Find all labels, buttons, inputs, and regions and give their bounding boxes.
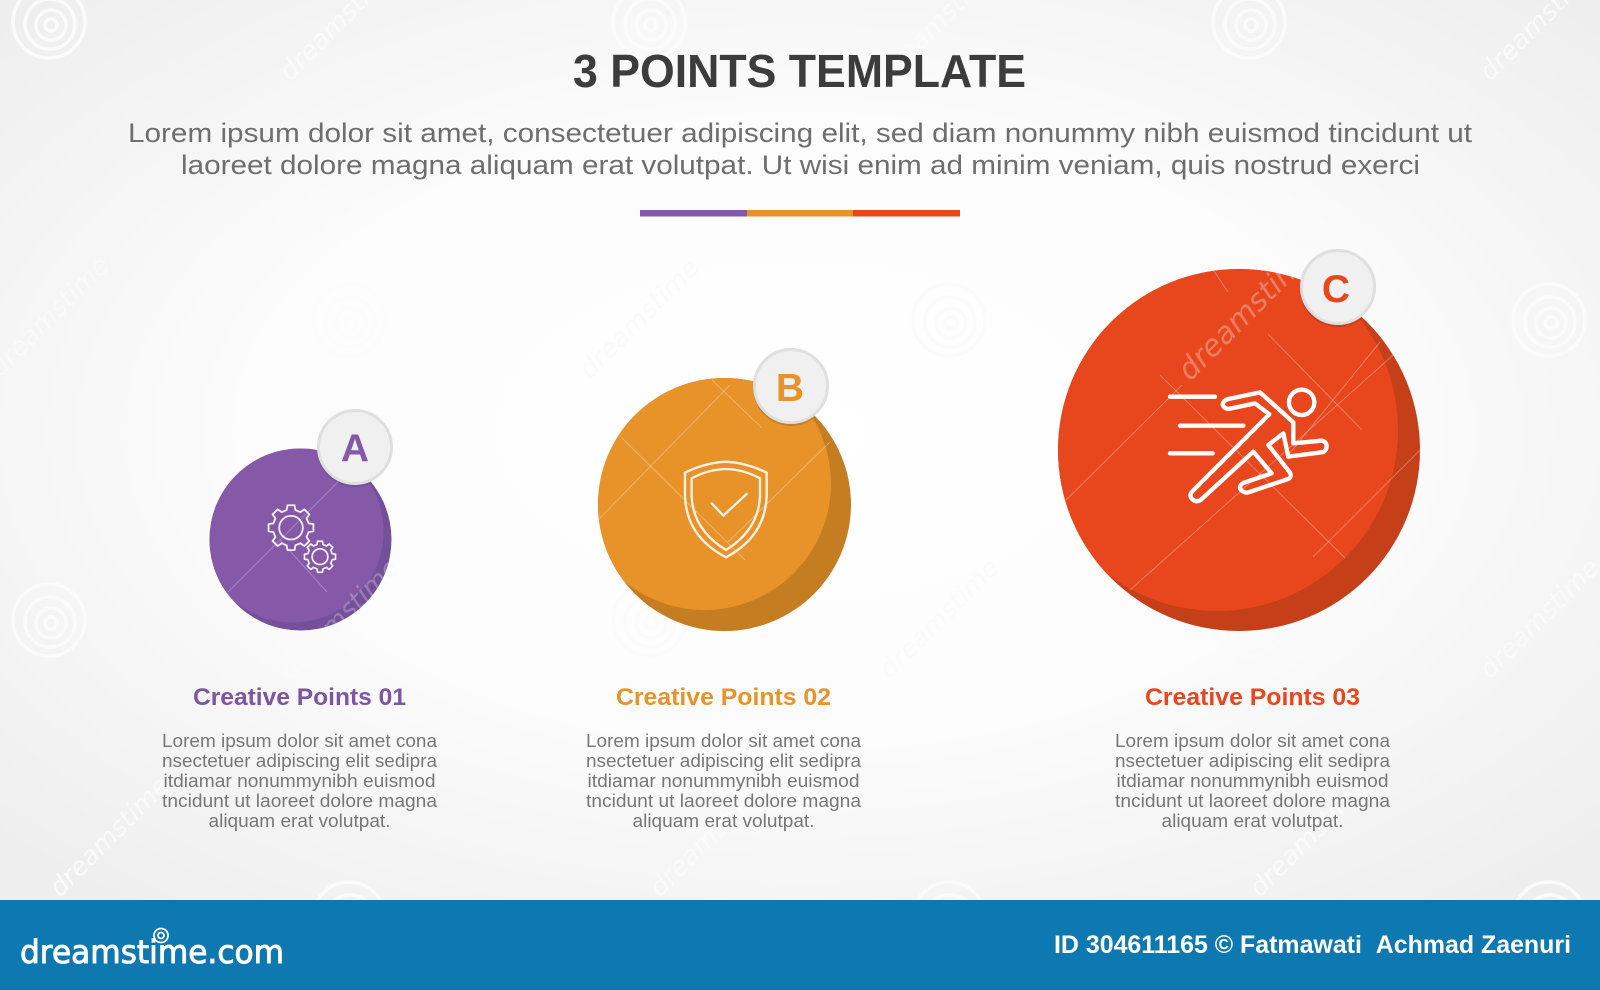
watermark pattern: dreamstime <box>1244 771 1376 903</box>
watermark pattern: dreamstime <box>574 253 706 385</box>
point 01 label: Creative Points 01 <box>193 684 406 711</box>
title: 3 POINTS TEMPLATE <box>573 45 1026 97</box>
footer credit: ID 304611165 © Fatmawati Achmad Zaenuri <box>1054 931 1571 959</box>
point 02 text block: Lorem ipsum dolor sit amet cona <box>586 731 862 751</box>
point 01 text block <box>162 731 438 831</box>
point 01 text block: nsectetuer adipiscing elit sedipra <box>162 751 438 771</box>
point C circle <box>1058 269 1420 631</box>
icon: running man <box>1170 390 1327 501</box>
icon: gears <box>269 505 336 572</box>
badge A <box>318 410 392 484</box>
badge B: B <box>776 367 804 410</box>
point A circle: dreamstime <box>274 553 406 685</box>
footer bar <box>0 900 1600 990</box>
point 03 label: Creative Points 03 <box>1145 684 1360 711</box>
point 03 text block: aliquam erat volutpat. <box>1162 811 1344 831</box>
tricolor divider <box>640 210 960 216</box>
badge B <box>754 350 828 422</box>
point 03 text block: nsectetuer adipiscing elit sedipra <box>1115 751 1391 771</box>
point 03 text block: Lorem ipsum dolor sit amet cona <box>1115 731 1391 751</box>
watermark pattern: dreamstime <box>44 771 176 903</box>
watermark pattern: dreamstime <box>274 553 406 685</box>
footer logo: dreamstime.com <box>20 933 284 971</box>
point 03 text block <box>1115 731 1391 831</box>
subtitle text block: laoreet dolore magna aliquam erat volutpat. Ut wisi enim ad minim veniam, quis nostrud exerci <box>181 150 1420 180</box>
point 02 text block <box>586 731 862 831</box>
badge C <box>1302 250 1374 324</box>
subtitle text block <box>128 118 1473 180</box>
point 01 text block: aliquam erat volutpat. <box>208 811 390 831</box>
point C circle: dreamstime <box>1171 235 1324 388</box>
point 01 text block: tncidunt ut laoreet dolore magna <box>162 791 438 811</box>
point 03 text block: itdiamar nonummynibh euismod <box>1116 771 1388 791</box>
point 02 text block: itdiamar nonummynibh euismod <box>588 771 860 791</box>
point B circle <box>598 378 851 631</box>
point 01 text block: Lorem ipsum dolor sit amet cona <box>162 731 438 751</box>
badge C: C <box>1322 268 1350 311</box>
point 03 text block: tncidunt ut laoreet dolore magna <box>1115 791 1391 811</box>
point 02 text block: aliquam erat volutpat. <box>632 811 814 831</box>
point 02 text block: tncidunt ut laoreet dolore magna <box>586 791 862 811</box>
subtitle text block: Lorem ipsum dolor sit amet, consectetuer adipiscing elit, sed diam nonummy nibh euismod tincidunt ut <box>128 118 1473 148</box>
point 02 label: Creative Points 02 <box>616 684 831 711</box>
point A circle <box>210 448 392 630</box>
badge A: A <box>341 428 369 470</box>
point 02 text block: nsectetuer adipiscing elit sedipra <box>586 751 862 771</box>
watermark pattern: dreamstime <box>874 553 1006 685</box>
icon: shield with check <box>685 462 767 557</box>
watermark pattern: dreamstime <box>644 771 776 903</box>
point 01 text block: itdiamar nonummynibh euismod <box>164 771 436 791</box>
